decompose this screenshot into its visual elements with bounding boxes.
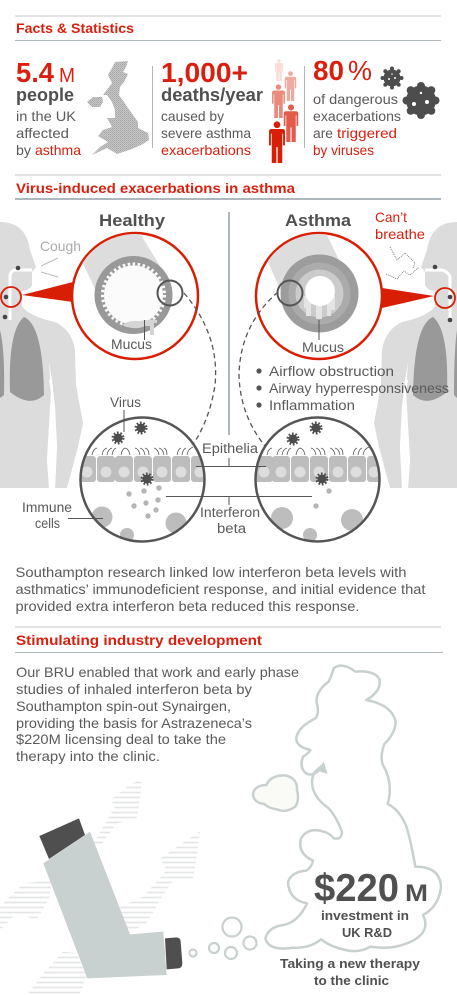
text: industry paragraph: $220M licensing deal to take the [16,731,226,747]
callout ring: healthy throat [1,287,21,307]
section rule: virus bottom [15,198,441,200]
icon: people fading [269,59,298,163]
stat: 1,000+ deaths: exacerbations [161,142,251,158]
heading: Virus-induced exacerbations in asthma: Virus-induced exacerbations in asthma [16,180,295,196]
stat: 80% viruses [313,55,401,158]
label: Epithelia: Epithelia [202,441,259,456]
divider: stats two [304,66,305,148]
section rule: facts top [15,15,441,17]
panel: healthy airway: Mucus [111,336,152,352]
icon: small virus gear [380,66,404,90]
label: Immune cells: Immune [22,500,72,515]
icon: large virus gear [402,82,440,119]
stat: 1,000+ deaths [161,57,263,158]
section rule: industry top [15,626,441,628]
stat: 5.4M people: affected [16,125,69,141]
stat: $220M: $220 [314,867,399,910]
label: Can't breathe: breathe [375,226,425,242]
label: Virus: Virus [110,395,141,410]
stat: 5.4M people: 5.4 [16,57,54,88]
label: Epithelia [196,441,266,466]
icons: viruses [113,423,327,484]
heading: Facts & Statistics: Facts & Statistics [16,21,134,36]
heading: Stimulating industry development: Stimulating industry development [16,632,262,648]
stat: 80% viruses: 80 [313,55,344,86]
label: Interferon beta: Interferon [200,505,260,520]
text: research paragraph: Southampton research linked low interferon beta levels with [16,564,407,580]
list: asthma symptoms: Airway hyperresponsiveness [269,380,449,396]
section rule: virus top [15,174,441,176]
stat: 5.4M people: in the UK [16,108,77,124]
panel: asthma airway: Mucus [302,339,344,355]
stat: 80% viruses: exacerbations [313,108,401,124]
stat: 1,000+ deaths: caused by [161,108,224,124]
text: research paragraph [16,564,426,614]
stat: 1,000+ deaths: 1,000+ [161,57,248,88]
text: industry paragraph: studies of inhaled interferon beta by [16,681,252,697]
label: Immune cells: cells [35,516,60,531]
figure: right body [374,222,457,488]
section rule: industry bottom [15,652,443,653]
divider: center [228,212,230,435]
label: Interferon beta: beta [217,521,247,536]
section rule: facts bottom [15,40,441,41]
stat: 5.4M people: by [16,142,31,158]
icon: UK thought cloud [253,666,441,951]
stat: 5.4M people [16,57,81,158]
panel: healthy epithelium circle [78,418,209,542]
list: asthma symptoms [256,363,449,413]
arrow: dashed link asthma [239,292,278,446]
icon: breath zigzag [386,247,419,279]
callout cone: healthy [22,282,73,302]
stat: 1,000+ deaths: deaths/year [161,85,263,105]
text: industry paragraph: Our BRU enabled that work and early phase [16,664,299,680]
background: hatched UK shapes [0,780,200,993]
stat: 80% viruses: are [313,125,333,141]
caption: Taking a new therapy to the clinic [280,956,421,988]
text: industry paragraph: therapy into the clinic. [16,748,160,764]
stat: 80% viruses: by viruses [313,142,374,158]
stat: $220M [314,867,428,940]
list: asthma symptoms: Inflammation [269,397,355,413]
label: Cough: Cough [40,238,81,254]
label: Interferon beta [166,496,312,536]
text: industry paragraph [16,664,299,764]
callout cone: asthma [382,288,434,308]
stat: 80% viruses: % [348,55,372,86]
panel: asthma epithelium circle [255,418,385,542]
stat: 5.4M people: people [16,85,74,105]
heading: Healthy: Healthy [99,211,166,230]
icon: thought bubbles [190,918,256,959]
text: industry paragraph: providing the basis for Astrazeneca’s [16,715,252,731]
callout ring: asthma throat [435,288,455,308]
label: Immune cells [22,500,103,531]
stat: 5.4M people: M [59,65,75,87]
caption: Taking a new therapy to the clinic: Taking a new therapy [280,956,421,971]
stat: $220M: M [405,880,428,907]
heading: Asthma: Asthma [285,211,352,230]
figure: left body [0,222,83,488]
text: research paragraph: asthmatics’ immunodeficient response, and initial evidence that [16,581,426,597]
text: research paragraph: provided extra interferon beta reduced this response. [16,598,360,614]
list: asthma symptoms: Airflow obstruction [269,363,394,379]
stat: 1,000+ deaths: severe asthma [161,125,251,141]
label: Can't breathe: Can’t [375,209,407,225]
divider: stats one [152,66,153,148]
panel: asthma airway [256,225,382,359]
stat: $220M: UK R&D [342,926,392,940]
caption: Taking a new therapy to the clinic: to the clinic [314,973,389,988]
arrow: dashed link healthy [184,293,216,443]
stat: 5.4M people: asthma [35,142,81,158]
text: industry paragraph: Southampton spin-out Synairgen, [16,698,231,714]
panel: healthy airway [70,225,198,359]
icon: cough lines [41,258,58,277]
label: Can't breathe [375,209,425,242]
icon: dotted UK map [87,61,149,155]
stat: $220M: investment in [321,909,409,923]
icon: inhaler [39,818,182,978]
stat: 80% viruses: triggered [337,125,397,141]
label: Virus [110,395,141,432]
stat: 80% viruses: of dangerous [313,91,398,107]
